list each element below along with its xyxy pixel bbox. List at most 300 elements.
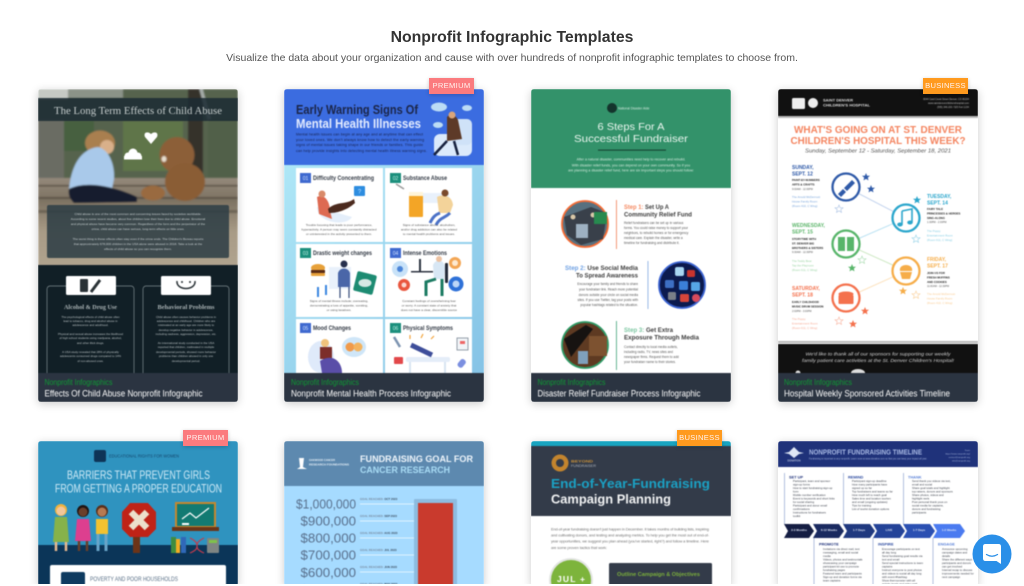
phase: set up: form [793, 490, 799, 494]
phase: engage: ENGAGE [938, 542, 955, 546]
black header: CHILDREN'S HOSPITAL [823, 104, 871, 108]
card: disaster relief [531, 89, 731, 402]
caption bar: Nonprofit Mental Health Process Infographic [291, 388, 451, 400]
phase: thank: email and social [912, 482, 932, 486]
phase: inspire [873, 538, 924, 586]
phase: promote: Sign-up and donation forms via [823, 575, 862, 579]
text: Tuesday: SEPT. 14 [927, 200, 948, 206]
phase: set up: confirmations [793, 507, 810, 511]
box: alcohol and drug use: Alcohol & Drug Use [64, 305, 117, 311]
box: alcohol and drug use: adolescence and adulthood. [72, 323, 109, 327]
header [284, 441, 484, 486]
phase: remind: How much left to reach goal [852, 493, 887, 497]
dark header: Campaign Planning [551, 492, 671, 506]
phase: engage: improvements needed for [942, 572, 974, 576]
step 3: Step 3: Get Extra [624, 327, 674, 334]
box: alcohol and drug use: lead to tobacco, drug and alcohol abuse in [63, 319, 118, 323]
card: mental health [284, 89, 484, 402]
phase: promote [814, 538, 863, 586]
box: alcohol and drug use: adolescents consumed drugs compared to 14% [60, 354, 121, 358]
box: behavioral problems: developmental period. [172, 359, 200, 363]
cell 05: Mood Changes [313, 326, 352, 332]
light blue body [284, 165, 484, 375]
phase: thank: Send thank you videos via text, [912, 479, 951, 483]
phase: set up: How to start fundraising sign-up [793, 486, 833, 490]
box: alcohol and drug use: of non-abused ones. [77, 359, 104, 363]
title band: The Long Term Effects of Child Abuse [54, 105, 222, 117]
month badge: JUL + [557, 574, 585, 584]
text: Wednesday: WEDNESDAY, [792, 223, 825, 229]
blue header: signs of mental issues taking shape in our friends or families. This guide [296, 143, 423, 147]
caption bar: Disaster Relief Fundraiser Process Infographic [538, 388, 701, 400]
icon: chalkboard [172, 502, 219, 531]
body background [284, 486, 484, 586]
step 1: medical care. Explain the disaster, write a [624, 236, 683, 240]
phase: engage: Announce upcoming [942, 547, 968, 551]
cell 05 [296, 319, 383, 375]
text: Wednesday: SEPT. 15 [792, 230, 813, 236]
box: alcohol and drug use: and other illicit drugs. [77, 341, 104, 345]
text: Saturday: EARLY CHILDHOOD [792, 300, 819, 304]
cell 03: Drastic weight changes [313, 251, 373, 257]
text: Friday: SEPT. 17 [927, 264, 948, 270]
caption bar [778, 373, 978, 402]
step 2: popular hashtags related to the situation. [580, 303, 638, 307]
phase: thank: Share goal totals and highlight [912, 486, 950, 490]
text: Tuesday: PRINCESSES & HEROES [927, 212, 961, 216]
header: CANCER RESEARCH [360, 465, 450, 476]
card: child abuse [38, 89, 238, 402]
icon: stop sign with X [122, 503, 156, 553]
dark lower section [38, 265, 238, 375]
card: end of year fundraising [531, 441, 731, 586]
phase: set up: Participant and donor email [793, 504, 827, 508]
black header [778, 89, 978, 116]
step 1: neighbors, to rebuild homes or for emergency [624, 231, 689, 235]
node: Friday muffin [892, 258, 920, 298]
phase: remind: signed up so far [852, 486, 872, 490]
title band [38, 98, 238, 121]
poster heading [790, 125, 966, 154]
phase: engage: participants and donors [942, 561, 972, 565]
step 1: Relief fundraisers can be set up in various [624, 221, 684, 225]
box: behavioral problems: developmental periods, showed more behavior [156, 350, 216, 354]
text: Wednesday: BROTHERS & SISTERS [792, 246, 823, 250]
text: Tuesday: FAIRY TALE [927, 207, 943, 211]
phase: remind: Participant sign-up deadline [852, 479, 887, 483]
phase: promote: Invitations via direct mail, text [823, 547, 860, 551]
dollar axis: $600,000 [301, 565, 356, 580]
navy header: info@nonprofit.org [952, 460, 971, 462]
dark header: BEYOND [571, 460, 594, 464]
cell 03: 03 [303, 251, 308, 257]
dollar axis: $700,000 [301, 548, 356, 562]
badge: business: BUSINESS [679, 433, 720, 442]
phase: promote: Featured team and participants [823, 572, 862, 576]
phase: set up: sign-up forms [793, 482, 811, 486]
text: Tuesday: The Poppy [927, 229, 941, 233]
text: Sunday: SUNDAY, [792, 165, 814, 171]
dark header [531, 446, 731, 516]
box: behavioral problems: mistreated at an early age are more likely to [158, 323, 215, 327]
green header [531, 89, 731, 188]
poster heading: WHAT'S GOING ON AT ST. DENVER [794, 125, 963, 136]
box: behavioral problems: Behavioral Problems [158, 305, 215, 311]
node: Sunday paint brush [832, 173, 875, 212]
poster heading: CHILDREN'S HOSPITAL THIS WEEK? [790, 136, 966, 147]
black header: 8044 Card Creek Street Denver, CO 80204 [923, 98, 970, 101]
intro text panel: that approximately 678,000 children in the USA alone were abused in 2018. Take a look at the [74, 242, 202, 246]
text: Tuesday: 1:30PM - 2:30PM [927, 221, 946, 224]
text: Sunday: The Arnold McDermott [792, 195, 820, 199]
node: Wednesday book [832, 230, 866, 271]
step 2: To Spread Awareness [576, 272, 639, 280]
black header: SAINT DENVER [823, 98, 853, 102]
phase: set up: for social sharing [793, 500, 815, 504]
blue header: your loved ones. We don't always know how to detect the early warning [296, 138, 424, 142]
intro paragraph: and cultivating donors, and testing and analyzing metrics. To help you get the most out of end-of- [551, 532, 710, 538]
text: Sunday: 9:00AM - 12:00PM [792, 188, 813, 191]
intro text panel: The worst thing is these effects often stay even if the crime ends. The Children's Bureau reports [73, 237, 204, 241]
text: Tuesday: TUESDAY, [927, 194, 952, 200]
intro text panel: Child abuse is one of the most common and concerning issues faced by societies worldwide. [75, 212, 202, 216]
text: Wednesday: ST. DENVER BIG [792, 242, 814, 246]
phase: thank [904, 473, 953, 524]
cell 02 [385, 168, 472, 242]
phase: remind: REMIND [848, 474, 864, 480]
phase: promote: showcasing your campaign [823, 561, 857, 565]
goal labels: GOAL REACHED: AUG 2023 [360, 531, 398, 535]
step 2: sites. If you use Twitter, tag your posts with [577, 298, 638, 302]
phase: promote: messaging, email and social [823, 550, 859, 554]
cell 01: Trouble focusing that leads to poor performance, [306, 223, 372, 227]
green header: After a natural disaster, communities need help to recover and rebuild. [577, 158, 685, 162]
phase: promote: team captains [823, 578, 841, 582]
green header: National Disaster Aide [618, 106, 650, 110]
phase: remind: How many participants have [852, 482, 888, 486]
phase: set up [784, 473, 835, 524]
dark step panel [609, 563, 712, 586]
badge: premium: PREMIUM [187, 433, 224, 442]
phase: remind: Top fundraisers and teams so far [852, 490, 893, 494]
timeline arrows [784, 524, 965, 538]
text: Friday: FRESH MUFFINS [927, 276, 950, 280]
blue poster top [38, 441, 238, 545]
dark header: FUNDRAISER [571, 464, 597, 468]
step 3: newspaper firms. Request them to add [624, 355, 679, 359]
cell 01: Difficulty Concentrating [313, 176, 374, 182]
phase: inspire: Send fundraising goal results via [882, 554, 923, 558]
intro text panel: crime, child abuse can have serious, long-term effects on little ones. [92, 227, 185, 231]
cell 04: Constant feelings of overwhelming fear [402, 299, 456, 303]
blue header [284, 89, 484, 165]
step 1: timeline for fundraising and distribute it. [624, 241, 680, 245]
timeline arrows: LIVE [886, 528, 892, 532]
header: FUNDRAISING GOAL FOR [360, 454, 473, 465]
cell 04: does not have a clear, discernible source [401, 308, 457, 312]
caption bar [531, 373, 731, 402]
cell 01: ? [358, 190, 362, 196]
step 2 [565, 261, 705, 309]
box: alcohol and drug use: of high school students using marijuana, alcohol, [59, 336, 122, 340]
goal labels: GOAL REACHED: JUN 2023 [360, 565, 397, 569]
phase: set up: toolkit [793, 514, 801, 518]
intro text panel [47, 205, 229, 258]
cell 06: 06 [393, 326, 398, 332]
navy header: Fundraising is important to any nonprofit. Learn more at www.donation.com so that you can keep your impact all year. [809, 456, 927, 460]
step 2: Encourage your family and friends to share [577, 282, 638, 286]
step 1 [562, 200, 692, 249]
blue header: Early Warning Signs Of [296, 102, 419, 117]
phase: set up: SET UP [789, 474, 803, 480]
text: Saturday: The Poppy [792, 317, 806, 321]
green header: Successful Fundraiser [574, 133, 689, 145]
phase: inspire: with event #hashtag [882, 575, 907, 579]
phase: engage: campaign dates and [942, 550, 968, 554]
phase: thank: participants [912, 510, 927, 514]
timeline arrows: 2-3 Months [791, 528, 807, 532]
node: Saturday drum [832, 284, 869, 327]
box: behavioral problems [143, 276, 229, 378]
phase: set up: Mobile number verification [793, 493, 826, 497]
caption bar: Nonprofit Infographics [784, 377, 852, 387]
cell 01: hyperactivity. A person may seem constantly distracted [302, 228, 377, 232]
text: Friday: AND COOKIES [927, 280, 947, 284]
caption bar: Nonprofit Infographics [291, 377, 359, 387]
phase: promote: Videos, photos and testimonials [823, 558, 863, 562]
text: Saturday: SEPT. 18 [792, 292, 813, 298]
black sponsor footer: family patient care activities at the St. Denver Children's Hospital! [802, 358, 955, 363]
cell 03: or using laxatives. [327, 308, 352, 312]
phase: thank: Share photos, videos and [912, 493, 944, 497]
goal labels: GOAL REACHED: OCT 2023 [360, 497, 398, 501]
cyan stripe [531, 441, 731, 446]
cell 03: Signs of mental illness include; overeating, [310, 299, 368, 303]
phase: set up: Participant, team and sponsor [793, 479, 830, 483]
intro paragraph: year opportunities, we suggest you plan ahead (you've started, right?) and follow a timeline. Here [551, 538, 710, 544]
phase: inspire: INSPIRE [878, 542, 894, 546]
title: Nonprofit Infographic Templates [391, 29, 633, 46]
text: Wednesday: (Room 611, C Wing) [792, 268, 817, 272]
icon: broken heart [145, 132, 157, 144]
goal labels [360, 497, 398, 586]
black sponsor footer: We'd like to thank all of our sponsors for supporting our weekly [806, 352, 951, 356]
timeline arrows: 1-7 Days [913, 528, 926, 532]
white info panel: POVERTY AND POOR HOUSEHOLDS [90, 577, 178, 583]
badge: business: BUSINESS [925, 81, 966, 90]
dollar axis: $800,000 [301, 530, 356, 546]
navy lower section [38, 545, 238, 586]
phase: engage: next campaign [942, 575, 961, 579]
navy header: contact@nonprofit.org [948, 456, 971, 459]
header: OAKWOOD CANCER [309, 458, 336, 462]
phase: inspire: Send special instructions to team [882, 561, 924, 565]
step 3: including radio, TV, news sites and [624, 350, 673, 354]
text: Saturday: MUSIC DRUM SESSION [792, 304, 823, 308]
dollar axis: $1,000,000 [296, 496, 356, 512]
phase: engage: Share the different ways [942, 558, 973, 562]
text: Tuesday: (Room 611, C Wing) [927, 238, 952, 242]
text: Sunday [792, 165, 820, 208]
phase: remind: Sales time and location tourism [852, 496, 892, 500]
illustration: three girls [53, 504, 108, 551]
text: Tuesday: Entertainment Room [927, 234, 953, 238]
cell 02: to mental health problems and issues. [403, 232, 455, 236]
badge: business [677, 430, 722, 446]
illustration: person on chair with clouds [431, 102, 472, 156]
white info panel [50, 565, 226, 586]
card: cancer research goal [284, 441, 484, 586]
badge: premium [429, 78, 474, 94]
text: Saturday: (Room 611, C Wing) [792, 326, 817, 330]
subtitle: Visualize the data about your organization and cause with over hundreds of nonprofit infographic templates to choose from. [226, 52, 798, 64]
phase: thank: top raisers, donors and sponsors [912, 490, 953, 494]
black header: (555) 346-200 / 525 Fort 1234 [937, 106, 970, 109]
intro paragraph [551, 526, 710, 550]
green header: With disaster relief funds, you can depend on your own community. So if you [572, 164, 690, 168]
intro text panel: effects of child abuse so you can recognize them. [104, 247, 172, 251]
navy header: NONPROFIT FUNDRAISING TIMELINE [809, 450, 922, 456]
phase: thank: donors and fundraising [912, 507, 941, 511]
phase: set up: Event to keywords and short links [793, 496, 835, 500]
cell 02: 02 [393, 176, 398, 182]
step 2: Step 2: Use Social Media [565, 265, 639, 272]
goal labels: GOAL REACHED: JUL 2023 [360, 548, 397, 552]
intro text panel: and physical abuse have become very common. Regardless of the form and the perpetrator of the [71, 222, 205, 226]
cell 01: 01 [303, 176, 308, 182]
phase: thank: Post personal thank yous on [912, 500, 948, 504]
green header: 6 Steps For A [598, 121, 664, 133]
box: behavioral problems: develop negative behavior in adolescence, [159, 328, 214, 332]
text: Sunday: House Family Room [792, 200, 818, 204]
phase: promote: PROMOTE [819, 542, 839, 546]
text: Friday: JOIN US FOR [927, 271, 945, 275]
poster heading: Sunday, September 12 - Saturday, September 18, 2021 [805, 148, 951, 154]
text: Sunday: SEPT. 12 [792, 172, 813, 178]
caption bar: Effects Of Child Abuse Nonprofit Infographic [44, 388, 203, 400]
caption bar: Hospital Weekly Sponsored Activities Timeline [784, 388, 950, 400]
icon: chat button [972, 534, 1012, 574]
navy header: Team [965, 450, 970, 452]
cell 01: or uninterested in the activity presented to them. [306, 232, 372, 236]
caption bar: Nonprofit Infographics [538, 377, 606, 387]
box: alcohol and drug use: The psychological effects of child abuse often [61, 315, 120, 319]
cell 02: Signs of substance abuse, alcoholism, [403, 223, 455, 227]
text: Saturday: Entertainment Room [792, 322, 818, 326]
cell 04: Intense Emotions [403, 251, 448, 257]
caption bar: Nonprofit Infographics [44, 377, 112, 387]
card: hospital timeline [778, 89, 978, 402]
step 3: Contact directly to local media outlets, [624, 345, 678, 349]
text: Wednesday: Tap the Playroom [792, 264, 814, 268]
step 1: forms. You could raise money to support your [624, 226, 689, 230]
badge: premium [183, 430, 228, 446]
text: Tuesday: SING-ALONG [927, 216, 945, 220]
text: Friday: 11:00AM - 12:30PM [927, 285, 949, 288]
step 1: Community Relief Fund [624, 212, 692, 218]
card: barriers for girls [38, 441, 238, 586]
phase: inspire: Show thermometer with all [882, 578, 915, 582]
cell 02: and/or drug addiction can also be related [401, 228, 457, 232]
blue poster top: EDUCATIONAL RIGHTS FOR WOMEN [109, 454, 179, 458]
cell 06 [385, 319, 472, 375]
phase: inspire: all day long [882, 550, 897, 554]
intro paragraph: End-of-year fundraising doesn't just happen in December. It takes months of building lists, inspiring [551, 526, 709, 532]
text: Sunday: ARTS & CRAFTS [792, 182, 815, 186]
dollar axis [296, 496, 356, 586]
text: Friday [927, 257, 955, 305]
timeline arrows: 1-7 Days [853, 528, 866, 532]
connector lines [846, 187, 906, 298]
icons: books dna calculator [171, 537, 219, 553]
step 2: your fundraiser link. Reach more potential [579, 288, 638, 292]
phase: remind: and email (ongoing updates) [852, 500, 888, 504]
badge: premium: PREMIUM [433, 81, 470, 90]
box: alcohol and drug use [47, 276, 134, 378]
phase: set up: Instructions for fundraisers [793, 510, 827, 514]
phase: inspire: text and email [882, 558, 900, 562]
thermometer bar [414, 499, 457, 586]
timeline arrows: 6-12 Weeks [821, 528, 837, 532]
box: behavioral problems: An international study conducted in the USA [158, 341, 214, 345]
text: Wednesday: The Teddy Bear [792, 259, 812, 263]
text: Sunday: PAINT-BY-NUMBERS [792, 178, 820, 182]
phase: promote: participant kit use to promote [823, 564, 859, 568]
badge: business [923, 78, 968, 94]
phase: remind: List of tourist donation options [852, 507, 890, 511]
text: Friday: FRIDAY, [927, 257, 947, 263]
phase: engage: can get involved [942, 564, 963, 568]
phase: remind: Tips for training [852, 504, 872, 508]
dark header: End-of-Year-Fundraising [551, 477, 710, 491]
cell 06: Physical Symptoms [403, 326, 454, 332]
caption bar [284, 373, 484, 402]
text: Wednesday [792, 223, 825, 272]
dollar axis: $900,000 [301, 514, 356, 528]
text: Wednesday: STORYTIME WITH [792, 237, 816, 241]
cell 03: demonstrating a loss of appetite, vomiting, [310, 304, 368, 308]
caption bar [38, 373, 238, 402]
phase: promote: fundraising pages [823, 568, 846, 572]
goal lines [360, 504, 418, 572]
phase: inspire: and videos to social all day long [882, 572, 922, 576]
green header: are planning a disaster relief fund, here are six important steps you should follow: [568, 168, 694, 172]
card: fundraising timeline [778, 441, 978, 586]
text: Sunday: (Room 410, C Wing) [792, 204, 818, 208]
dark step panel: Outline Campaign & Objectives [617, 572, 700, 578]
black header: www.saintdenverchildrenshospital.com [928, 102, 969, 105]
box: alcohol and drug use: Physical and sexual abuse increases the likelihood [58, 332, 123, 336]
phase: thank: THANK [908, 474, 922, 480]
text: Saturday [792, 286, 823, 330]
box: behavioral problems: problems than children abused in only one [159, 354, 214, 358]
intro paragraph: are some proven tactics that work: [551, 545, 607, 550]
navy header [778, 441, 978, 467]
timeline arrows: 1-2 Weeks [942, 528, 957, 532]
blue header: Mental Health Illnesses [296, 116, 421, 131]
cell 02: Substance Abuse [403, 176, 448, 182]
header: RESEARCH FOUNDATIONS [309, 462, 349, 466]
node: Tuesday music note [892, 196, 921, 242]
black sponsor footer [778, 344, 978, 377]
phase: inspire: captains [882, 564, 893, 568]
photo: child and teddy bear [38, 89, 238, 268]
phase: inspire: Instruct everyone to post photos [882, 568, 922, 572]
phase: promote: media [823, 554, 831, 558]
phase: engage: details [942, 554, 951, 558]
text: Friday: The Arnold McDermott [927, 292, 955, 296]
phase: thank: social media for captains, [912, 504, 944, 508]
